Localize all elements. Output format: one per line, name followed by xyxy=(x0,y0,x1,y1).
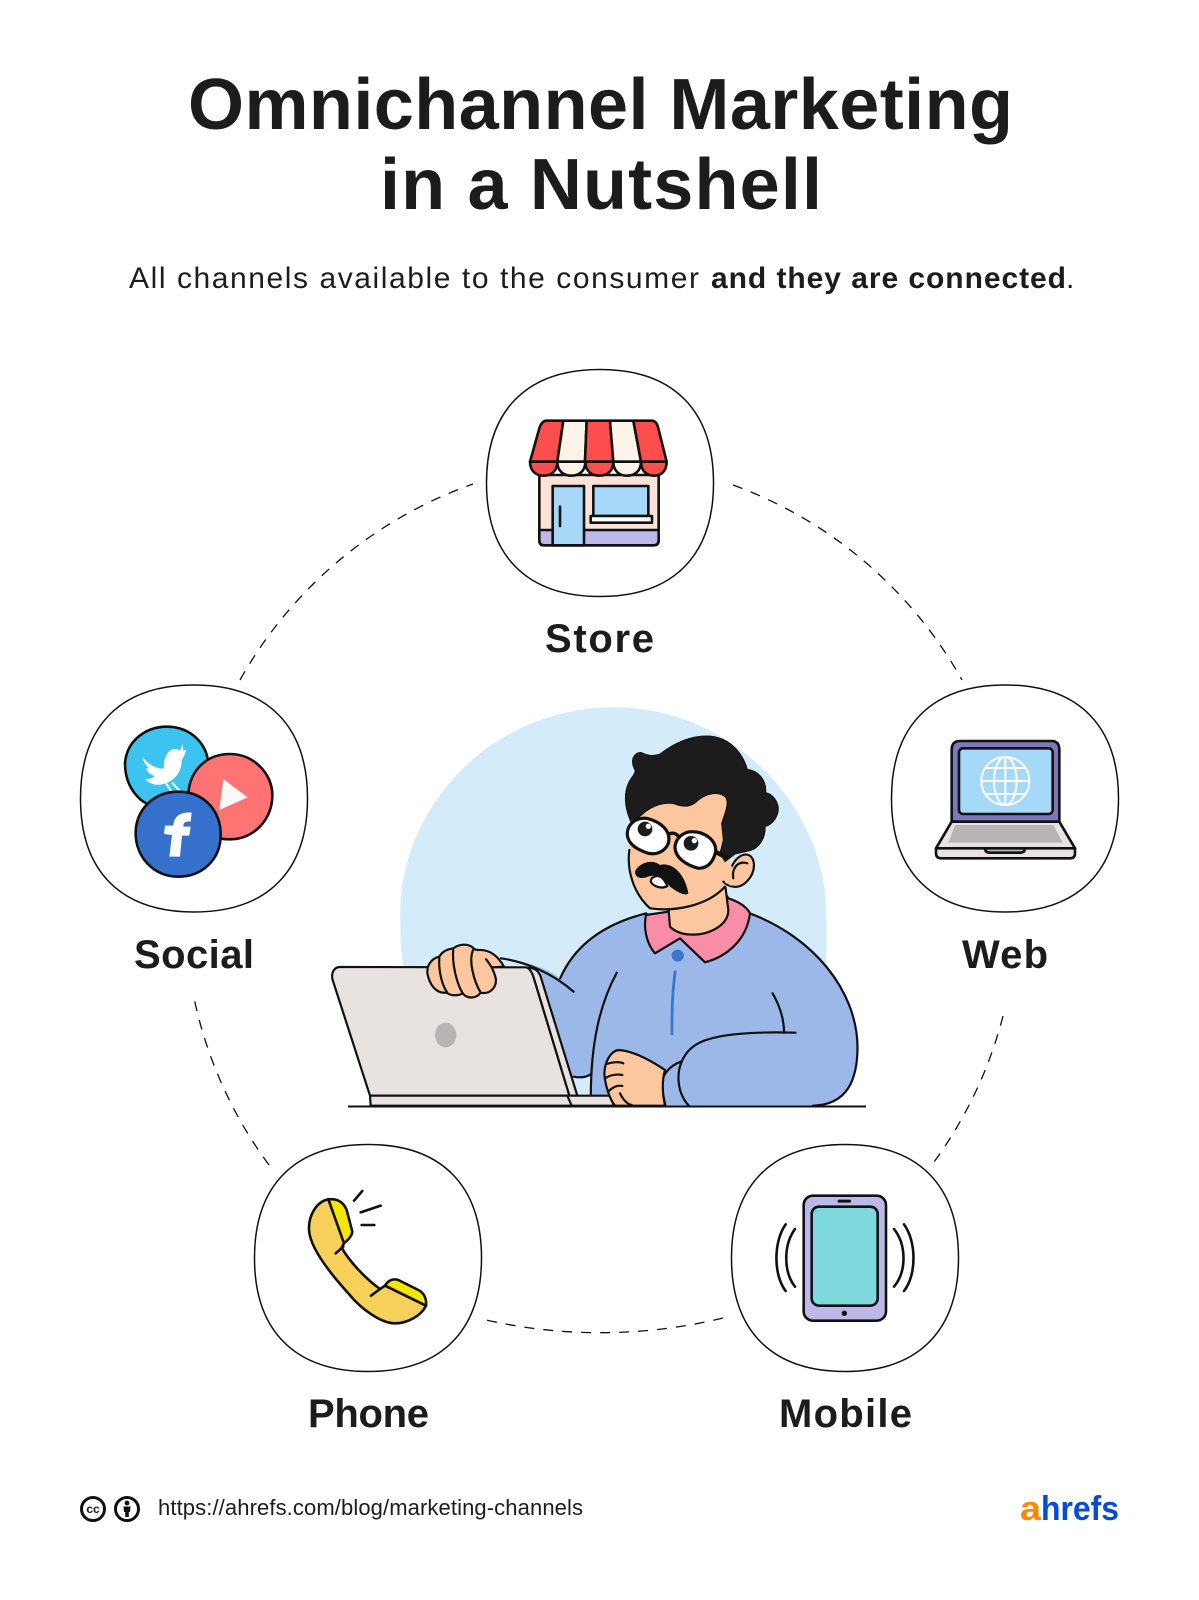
hand on laptop lid xyxy=(427,945,504,997)
store label: Store xyxy=(545,617,654,661)
hair xyxy=(625,736,778,862)
ahrefs logo: hrefs xyxy=(1041,1490,1119,1528)
subtitle: and they are connected xyxy=(711,262,1066,295)
icon: vibrating mobile xyxy=(776,1196,913,1321)
man's sweater xyxy=(501,913,858,1106)
glasses xyxy=(627,818,728,868)
man's head xyxy=(625,736,778,962)
social ring xyxy=(80,685,308,912)
channel: store xyxy=(486,370,714,661)
icon: telephone handset xyxy=(309,1191,426,1323)
channel: phone xyxy=(254,1144,482,1436)
title: Omnichannel Marketing xyxy=(188,65,1013,145)
central illustration: man at laptop xyxy=(332,707,866,1106)
subtitle: All channels available to the consumer xyxy=(129,262,699,295)
web label: Web xyxy=(962,933,1048,977)
footer url: https://ahrefs.com/blog/marketing-channels xyxy=(158,1495,583,1520)
icon: laptop with globe xyxy=(936,741,1075,858)
footer licence icons xyxy=(82,1498,138,1520)
phone label: Phone xyxy=(308,1392,429,1436)
title xyxy=(188,65,1013,225)
channel: mobile xyxy=(732,1144,958,1436)
phone ring xyxy=(254,1144,482,1372)
ear xyxy=(723,855,754,887)
laptop xyxy=(332,967,614,1106)
subtitle: . xyxy=(1066,262,1074,295)
web ring xyxy=(892,685,1118,912)
channel: web xyxy=(892,685,1118,977)
icon: store xyxy=(530,421,667,545)
social label: Social xyxy=(134,933,254,977)
mobile label: Mobile xyxy=(779,1392,912,1436)
neck xyxy=(668,883,728,935)
face xyxy=(629,793,735,909)
title: in a Nutshell xyxy=(380,145,822,225)
table line xyxy=(348,1106,866,1108)
ahrefs logo: a xyxy=(1020,1490,1042,1528)
hand on table xyxy=(604,1050,665,1106)
dashed connection ring xyxy=(194,484,1003,1333)
subtitle xyxy=(129,262,1074,295)
mobile ring xyxy=(732,1144,958,1372)
footer licence icons: cc xyxy=(86,1502,100,1516)
background blob xyxy=(400,707,826,1103)
channel: social xyxy=(80,685,308,977)
icon: social bubbles xyxy=(125,727,272,877)
laptop and hands xyxy=(332,945,665,1106)
mustache and tooth xyxy=(635,862,688,894)
collar xyxy=(645,890,750,962)
store ring xyxy=(486,370,714,596)
